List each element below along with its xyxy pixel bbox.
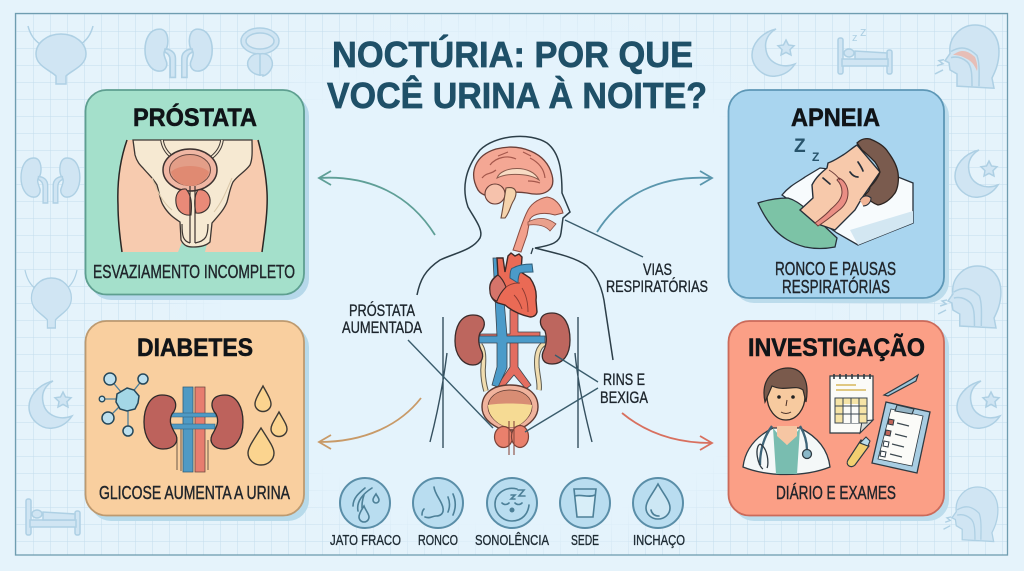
brain [474, 147, 553, 218]
title [327, 33, 707, 116]
symptom: ronco: RONCO [418, 532, 458, 549]
arrow: to diabetes [319, 398, 421, 449]
illustration: pelvis and prostate [118, 140, 267, 252]
heading: próstata: PRÓSTATA [133, 102, 257, 132]
symptom: sede [560, 478, 610, 549]
caption: ronco e pausas respiratórias: RONCO E PAUSAS [775, 259, 896, 279]
title: NOCTÚRIA: POR QUE [332, 33, 693, 75]
neck and chin detail [531, 248, 533, 254]
icon: sleepy face [487, 478, 537, 528]
icon: kidneys [144, 387, 243, 472]
panel: investigação [728, 321, 949, 521]
snore letters: Z [794, 136, 806, 157]
symptom: inchaço [633, 478, 685, 549]
arrow: to apneia [597, 171, 712, 232]
caption: ronco e pausas respiratórias [775, 259, 896, 297]
icon: weak stream [340, 478, 390, 528]
illustration: doctor [743, 368, 830, 474]
symptom: ronco [413, 478, 463, 549]
symptom: sonolência [475, 478, 549, 549]
icon: nose [413, 478, 463, 528]
airway [513, 197, 563, 252]
label: rins e bexiga [600, 371, 648, 407]
illustration: checklist clipboard [872, 402, 930, 473]
arrow: to próstata [319, 171, 435, 235]
prostate [494, 426, 528, 448]
label: vias respiratórias: VIAS [643, 261, 672, 279]
panel: apneia [728, 90, 949, 303]
label: próstata aumentada: PRÓSTATA [349, 301, 415, 320]
label: próstata aumentada [342, 301, 422, 337]
illustration: pen [884, 375, 918, 396]
label: vias respiratórias [606, 261, 708, 296]
background icons: z [860, 24, 866, 39]
arrow: to investigação [622, 413, 712, 450]
symptom: inchaço: INCHAÇO [633, 532, 685, 549]
caption: glicose aumenta a urina: GLICOSE AUMENTA A URINA [99, 483, 290, 503]
caption: ronco e pausas respiratórias: RESPIRATÓRIAS [782, 276, 890, 297]
symptom: sede: SEDE [571, 532, 599, 549]
leader lines [408, 220, 643, 432]
panel: diabetes [86, 321, 309, 521]
bladder [482, 385, 538, 430]
central body diagram [408, 136, 643, 455]
snore letters [794, 136, 819, 164]
caption: diário e exames: DIÁRIO E EXAMES [776, 483, 896, 503]
icon: glucose molecule [99, 373, 148, 436]
heading: apneia: APNEIA [791, 104, 880, 132]
kidneys [455, 313, 570, 365]
label: rins e bexiga: BEXIGA [600, 389, 648, 407]
symptom: jato fraco [330, 478, 401, 549]
label: vias respiratórias: RESPIRATÓRIAS [606, 277, 708, 296]
label: próstata aumentada: AUMENTADA [342, 319, 422, 337]
panel: próstata [86, 90, 309, 300]
illustration: diary calendar [830, 374, 873, 433]
torso lines [430, 317, 592, 448]
label: rins e bexiga: RINS E [603, 371, 645, 389]
illustration: test tube [847, 437, 870, 467]
illustration: sleeping man [758, 136, 913, 248]
urethra [509, 421, 514, 455]
icon: water glass [560, 478, 610, 528]
heart [490, 253, 537, 317]
background icons: z [852, 32, 858, 44]
snore letters: Z [812, 150, 819, 164]
heading: investigação: INVESTIGAÇÃO [748, 332, 925, 362]
caption: esvaziamento incompleto: ESVAZIAMENTO INCOMPLETO [93, 262, 295, 282]
ureters [480, 343, 545, 391]
icon: water drop [633, 478, 683, 528]
symptom: jato fraco: JATO FRACO [330, 532, 401, 549]
veins and arteries [478, 258, 545, 389]
symptom: sonolência: SONOLÊNCIA [475, 532, 549, 549]
body outline [417, 136, 613, 360]
heading: diabetes: DIABETES [137, 334, 253, 362]
icon: urine drops [248, 386, 287, 465]
title: VOCÊ URINA À NOITE? [327, 74, 707, 116]
